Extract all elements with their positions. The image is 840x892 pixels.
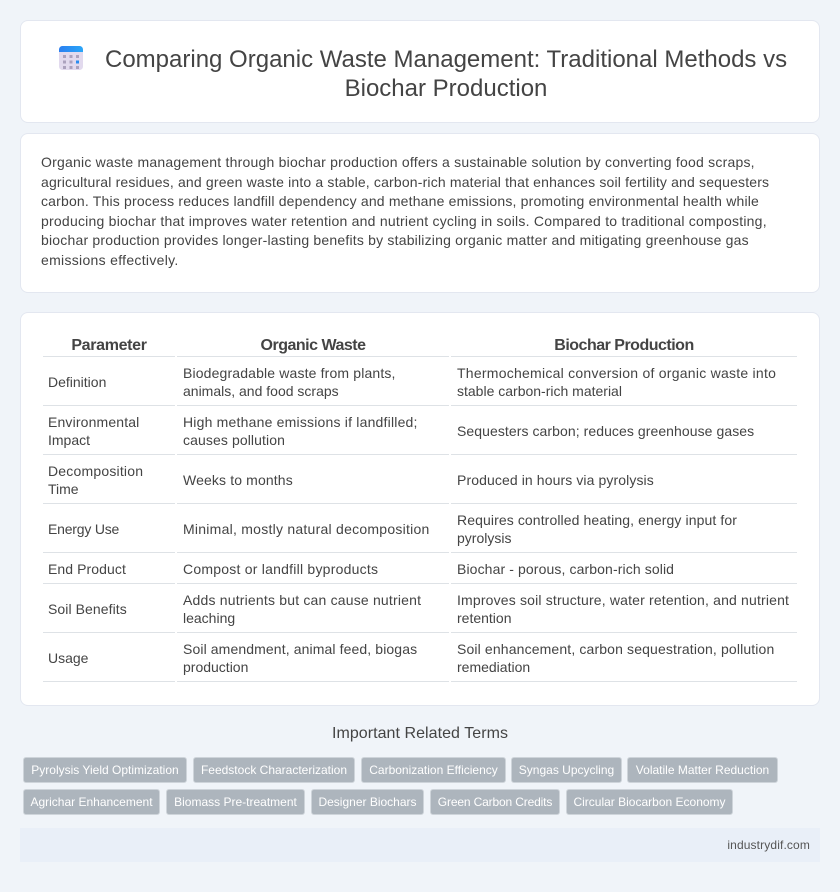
intro paragraph: Organic waste management through biochar production offers a sustainable solution by converting food scraps, <box>41 154 755 170</box>
intro text panel <box>20 133 820 293</box>
row: end product: Biochar - porous, carbon-rich solid <box>457 561 674 577</box>
related terms chips: Volatile Matter Reduction <box>636 763 769 777</box>
row: environmental impact: causes pollution <box>183 432 285 448</box>
footer source: industrydif.com <box>727 838 810 852</box>
comparison table <box>43 337 797 682</box>
row: energy use: Minimal, mostly natural decomposition <box>183 521 430 537</box>
comparison table panel <box>20 312 820 706</box>
row: soil benefits: retention <box>457 610 511 626</box>
row: end product: Compost or landfill byproducts <box>183 561 378 577</box>
row: soil benefits: Adds nutrients but can cause nutrient <box>183 592 421 608</box>
row: decomposition time: Produced in hours via pyrolysis <box>457 472 654 488</box>
icon: calendar <box>59 46 83 70</box>
table header <box>71 337 694 354</box>
row: environmental impact: Impact <box>48 432 90 448</box>
row: energy use: Energy Use <box>48 521 119 537</box>
row: end product <box>48 561 674 577</box>
related terms chips: Green Carbon Credits <box>438 795 552 809</box>
intro paragraph: agricultural residues, and green waste into a stable, carbon-rich material that enhances soil fertility and sequesters <box>41 174 769 190</box>
row: usage: Soil enhancement, carbon sequestration, pollution <box>457 641 774 657</box>
related terms chips: Biomass Pre-treatment <box>174 795 297 809</box>
table header: Parameter <box>71 337 147 354</box>
row: soil benefits <box>48 592 789 626</box>
related terms chips: Feedstock Characterization <box>201 763 347 777</box>
row: definition: stable carbon-rich material <box>457 383 622 399</box>
row: usage <box>48 641 774 675</box>
row: energy use <box>48 512 737 546</box>
related terms chips: Circular Biocarbon Economy <box>573 795 726 809</box>
related terms chips <box>23 757 778 815</box>
row: environmental impact: Sequesters carbon; reduces greenhouse gases <box>457 423 754 439</box>
related terms chips: Designer Biochars <box>318 795 417 809</box>
row: usage: production <box>183 659 248 675</box>
related terms chips: Carbonization Efficiency <box>369 763 498 777</box>
related terms chips: Agrichar Enhancement <box>30 795 153 809</box>
row: environmental impact: High methane emissions if landfilled; <box>183 414 418 430</box>
row: decomposition time: Decomposition <box>48 463 143 479</box>
related terms heading: Important Related Terms <box>332 725 508 742</box>
row: definition: Biodegradable waste from plants, <box>183 365 396 381</box>
row: decomposition time <box>48 463 654 497</box>
row: soil benefits: Soil Benefits <box>48 601 127 617</box>
row: soil benefits: leaching <box>183 610 235 626</box>
row: decomposition time: Weeks to months <box>183 472 293 488</box>
row: definition: Thermochemical conversion of organic waste into <box>457 365 776 381</box>
title: Comparing Organic Waste Management: Traditional Methods vs <box>105 46 787 73</box>
row: environmental impact: Environmental <box>48 414 139 430</box>
row: environmental impact <box>48 414 754 448</box>
row: decomposition time: Time <box>48 481 79 497</box>
row: energy use: Requires controlled heating, energy input for <box>457 512 737 528</box>
related terms chips: Pyrolysis Yield Optimization <box>31 763 179 777</box>
row: definition: animals, and food scraps <box>183 383 339 399</box>
row: soil benefits: Improves soil structure, water retention, and nutrient <box>457 592 789 608</box>
table header: Biochar Production <box>554 337 694 354</box>
intro paragraph: carbon. This process reduces landfill dependency and methane emissions, promoting environmental health while <box>41 193 759 209</box>
row: definition <box>48 365 776 399</box>
row: usage: Soil amendment, animal feed, biogas <box>183 641 417 657</box>
row: end product: End Product <box>48 561 126 577</box>
title: Biochar Production <box>345 75 547 102</box>
intro paragraph: biochar production provides longer-lasting benefits by stabilizing organic matter and mitigating greenhouse gas <box>41 232 749 248</box>
footer bar <box>20 828 820 862</box>
row: usage: remediation <box>457 659 530 675</box>
row: definition: Definition <box>48 374 106 390</box>
table header: Organic Waste <box>261 337 365 354</box>
related terms chips: Syngas Upcycling <box>519 763 614 777</box>
intro paragraph <box>41 154 769 268</box>
row: energy use: pyrolysis <box>457 530 511 546</box>
row: usage: Usage <box>48 650 88 666</box>
header panel <box>20 20 820 123</box>
title <box>105 46 787 102</box>
intro paragraph: emissions effectively. <box>41 252 179 268</box>
intro paragraph: producing biochar that improves water retention and nutrient cycling in soils. Compared to traditional composting, <box>41 213 767 229</box>
